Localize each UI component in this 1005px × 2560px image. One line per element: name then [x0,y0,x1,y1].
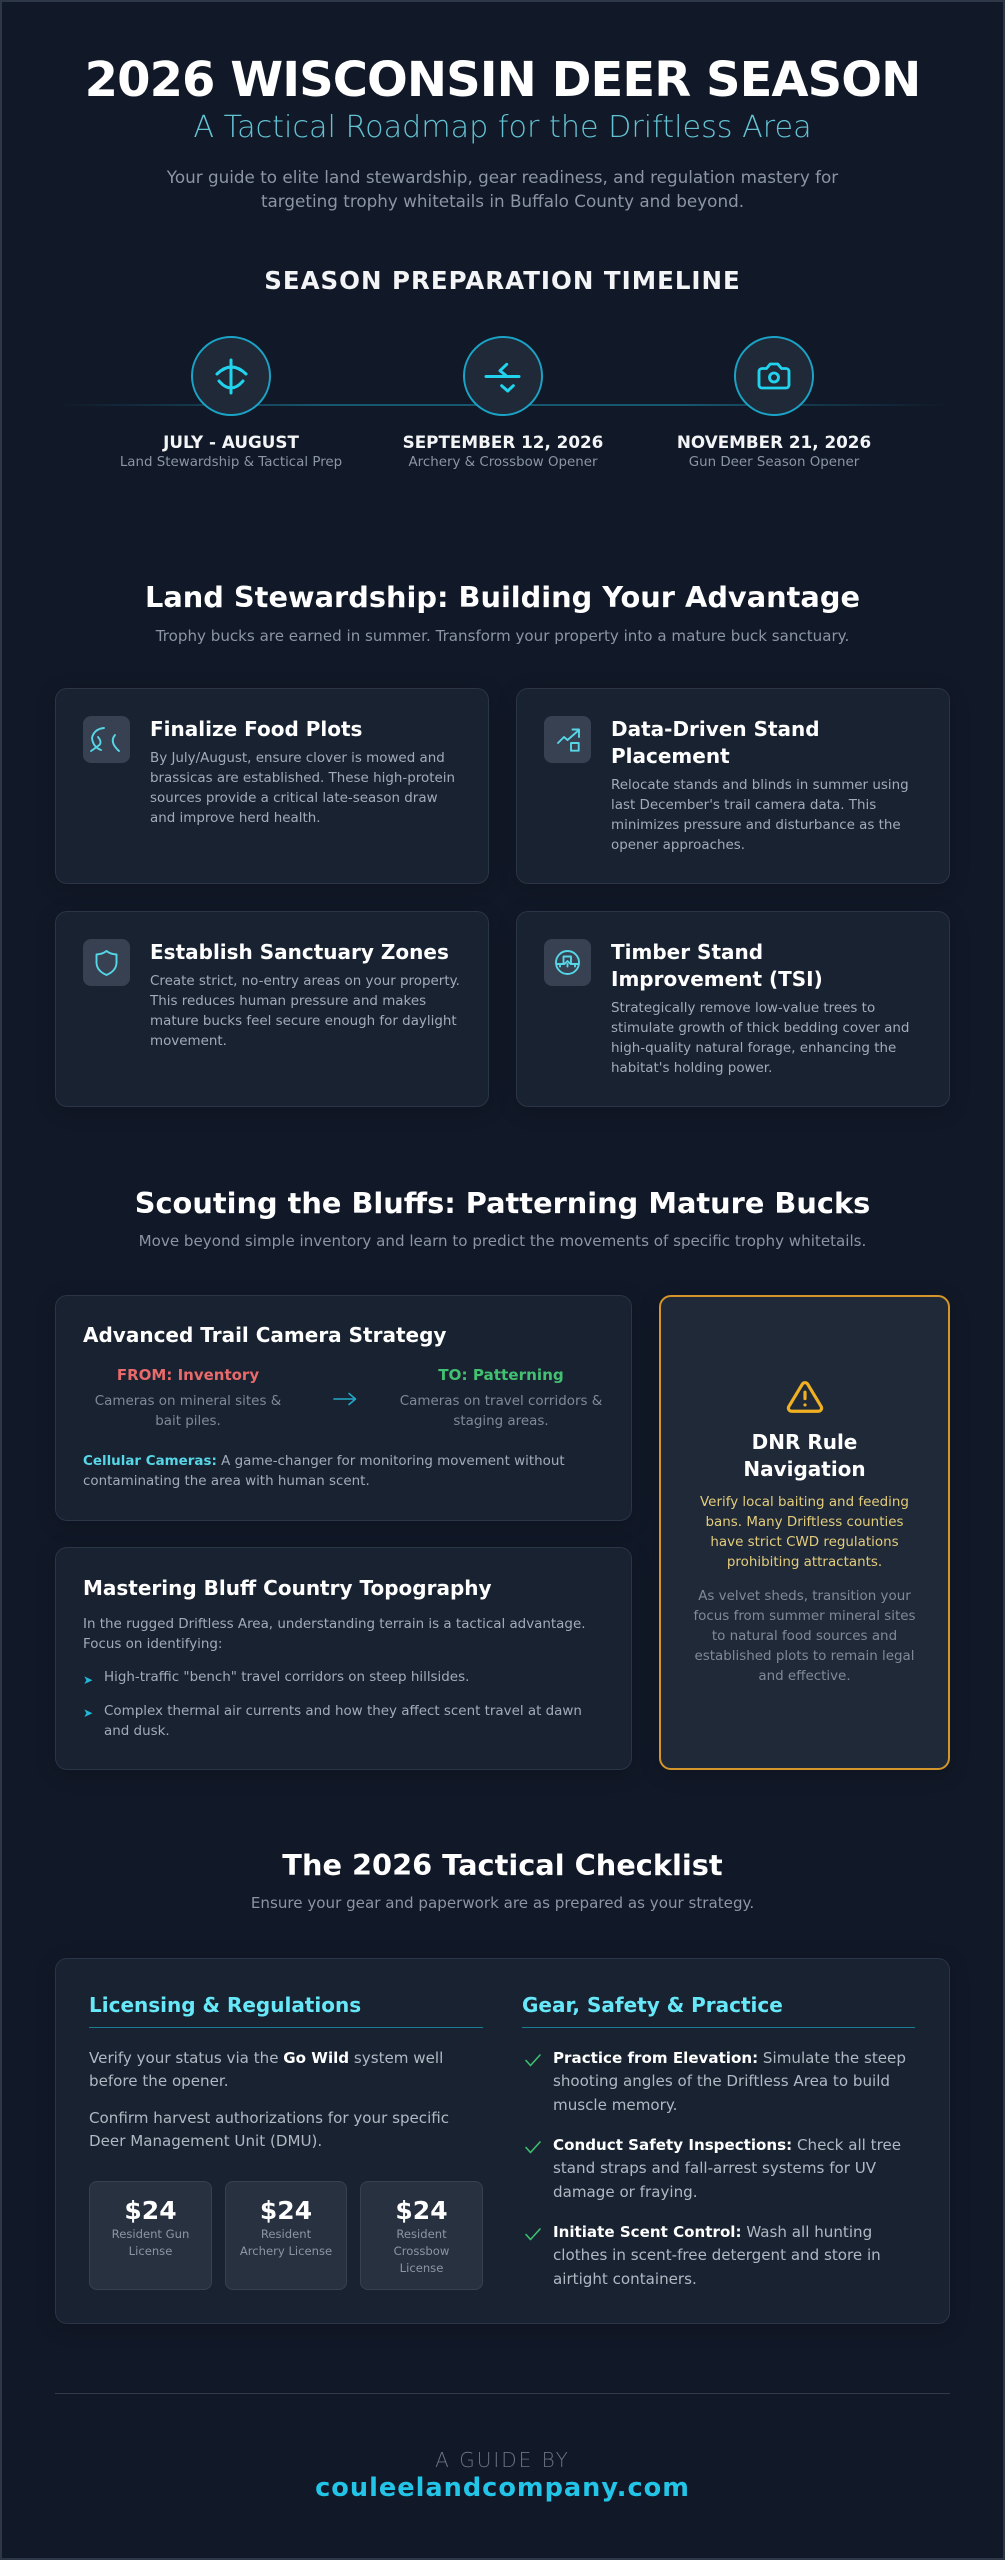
stat: resident archery license: Archery License [240,2244,332,2258]
card title [611,940,823,991]
from column [95,1366,281,1429]
intro text [166,167,838,210]
icon: shield [83,939,130,986]
card title: Establish Sanctuary Zones [150,940,449,964]
bullet text [104,1704,582,1739]
card text: sources provide a critical late-season draw [150,791,438,806]
icon: check [525,2228,541,2240]
card title: Placement [611,744,730,768]
card text: habitat's holding power. [611,1061,772,1076]
subtitle: A Tactical Roadmap for the Driftless Area [193,110,812,145]
section subtitle: Trophy bucks are earned in summer. Transform your property into a mature buck sanctuary. [156,627,849,645]
card text: In the rugged Driftless Area, understanding terrain is a tactical advantage. [83,1617,585,1632]
callout warning text: have strict CWD regulations [710,1535,899,1550]
panel: checklist [55,1958,950,2324]
footer brand: couleelandcompany.com [315,2473,690,2503]
column: licensing and regulations [89,1993,483,2150]
callout title: DNR Rule [752,1430,857,1454]
paragraph: go wild [89,2049,443,2090]
checklist item: elevation [553,2049,906,2114]
stat: resident archery license: Resident [261,2227,311,2241]
column: gear safety and practice [522,1993,915,2288]
checklist item: scent: clothes in scent-free detergent and store in [553,2246,881,2264]
milestone date: JULY - AUGUST [163,432,299,452]
stat: resident archery license [225,2181,347,2290]
checklist item: elevation: muscle memory. [553,2096,677,2114]
card text: Relocate stands and blinds in summer using [611,778,909,793]
cellular cameras note [83,1454,565,1489]
card text [611,1001,909,1076]
panel: trail camera strategy [55,1295,632,1521]
milestone date: SEPTEMBER 12, 2026 [403,432,603,452]
icon: food plot [83,716,130,763]
icon: check [525,2141,541,2154]
callout secondary text: focus from summer mineral sites [693,1609,916,1624]
milestone description: Land Stewardship & Tactical Prep [120,455,342,470]
milestone: November 21 [677,336,871,470]
callout secondary text: and effective. [758,1669,851,1684]
paragraph: go wild: before the opener. [89,2072,229,2090]
paragraph: harvest authorizations [89,2109,449,2150]
icon: trend and square [544,716,591,763]
footer label: A GUIDE BY [435,2448,570,2472]
to text [400,1394,602,1429]
milestone description: Gun Deer Season Opener [689,455,859,470]
bullet text: and dusk. [104,1724,170,1739]
card text [150,751,455,826]
to label: TO: Patterning [438,1366,564,1384]
card title: Timber Stand [611,940,763,964]
card text: Create strict, no-entry areas on your property. [150,974,460,989]
intro text: Your guide to elite land stewardship, gear readiness, and regulation mastery for [167,167,838,187]
paragraph: go wild: Verify your status via the Go Wild system well [89,2049,443,2067]
stat: resident crossbow license: Crossbow [394,2244,449,2258]
bullet marker: ➤ [83,1706,93,1720]
section subtitle: Ensure your gear and paperwork are as prepared as your strategy. [251,1894,754,1912]
checklist item: safety: stand straps and fall-arrest systems for UV [553,2159,876,2177]
checklist item: safety [553,2136,901,2201]
card text: brassicas are established. These high-protein [150,771,455,786]
icon: split arrows [463,336,543,416]
card text: Strategically remove low-value trees to [611,1001,875,1016]
cellular cameras note: contaminating the area with human scent. [83,1474,370,1489]
panel: DNR rule navigation [659,1295,950,1770]
card text: last December's trail camera data. This [611,798,876,813]
to column [400,1366,602,1429]
timeline line [55,404,950,406]
stat: resident archery license: $24 [260,2196,312,2225]
callout secondary text: to natural food sources and [712,1629,897,1644]
callout warning text [700,1495,909,1570]
icon: timber circle [544,939,591,986]
heading: season preparation timeline: SEASON PREPARATION TIMELINE [264,266,741,295]
panel: bluff topography [55,1547,632,1770]
stat: resident crossbow license: License [400,2261,443,2275]
stat: resident crossbow license: Resident [396,2227,447,2241]
checklist item: elevation: shooting angles of the Driftless Area to build [553,2072,890,2090]
from text [95,1394,281,1429]
to text: Cameras on travel corridors & [400,1394,602,1409]
bullet text: High-traffic "bench" travel corridors on steep hillsides. [104,1670,469,1685]
checklist item: safety: Conduct Safety Inspections: Check all tree [553,2136,901,2154]
from text: bait piles. [155,1414,221,1429]
card title [611,717,820,768]
callout title: Navigation [743,1457,866,1481]
card text: Focus on identifying: [83,1637,222,1652]
checklist item: elevation: Practice from Elevation: Simulate the steep [553,2049,906,2067]
icon: check [525,2054,541,2066]
heading: scouting the bluffs: Scouting the Bluffs: Patterning Mature Bucks [135,1186,870,1220]
card title: Mastering Bluff Country Topography [83,1576,492,1600]
checklist item: scent: airtight containers. [553,2270,697,2288]
from text: Cameras on mineral sites & [95,1394,281,1409]
stat: resident gun license [89,2181,212,2290]
milestone date: NOVEMBER 21, 2026 [677,432,871,452]
panel: food plots [55,688,489,884]
bullet text: Complex thermal air currents and how they affect scent travel at dawn [104,1704,582,1719]
timeline [86,336,919,470]
card text: opener approaches. [611,838,745,853]
callout title [743,1430,866,1481]
card text: minimizes pressure and disturbance as the [611,818,901,833]
stat: resident gun license: License [129,2244,172,2258]
panel: stand placement [516,688,950,884]
to text: staging areas. [453,1414,549,1429]
panel: sanctuary zones [55,911,489,1107]
paragraph: harvest authorizations: Confirm harvest authorizations for your specific [89,2109,449,2127]
column heading: Licensing & Regulations [89,1993,361,2017]
callout warning text: bans. Many Driftless counties [706,1515,903,1530]
intro text: targeting trophy whitetails in Buffalo County and beyond. [261,190,744,210]
column heading: Gear, Safety & Practice [522,1993,783,2017]
checklist item: scent [553,2223,881,2288]
card title: Finalize Food Plots [150,717,362,741]
card text: This reduces human pressure and makes [150,994,426,1009]
bullet marker: ➤ [83,1673,93,1687]
card text: movement. [150,1034,227,1049]
card text [150,974,460,1049]
icon: anchor marker [191,336,271,416]
card title: Improvement (TSI) [611,967,823,991]
callout secondary text [693,1589,916,1684]
card title: Data-Driven Stand [611,717,820,741]
card title: Advanced Trail Camera Strategy [83,1323,446,1347]
card text: By July/August, ensure clover is mowed and [150,751,445,766]
callout secondary text: established plots to remain legal [694,1649,914,1664]
milestone description: Archery & Crossbow Opener [409,455,597,470]
heading: land stewardship: Land Stewardship: Building Your Advantage [145,580,860,614]
milestone: July - August [120,336,342,470]
stat: resident crossbow license [360,2181,483,2290]
callout warning text: prohibiting attractants. [727,1555,882,1570]
arrow: from to [333,1392,356,1406]
callout secondary text: As velvet sheds, transition your [698,1589,911,1604]
panel: timber stand improvement [516,911,950,1107]
stat: resident gun license: $24 [124,2196,177,2225]
from label: FROM: Inventory [117,1366,259,1384]
card text: stimulate growth of thick bedding cover and [611,1021,909,1036]
milestone: September 12 [403,336,603,470]
callout warning text: Verify local baiting and feeding [700,1495,909,1510]
section subtitle: Move beyond simple inventory and learn to predict the movements of specific trophy whitetails. [139,1232,866,1250]
stat: resident gun license: Resident Gun [112,2227,189,2241]
stat: resident crossbow license: $24 [395,2196,448,2225]
checklist item: scent: Initiate Scent Control: Wash all hunting [553,2223,872,2241]
card text: mature bucks feel secure enough for daylight [150,1014,457,1029]
card text: and improve herd health. [150,811,321,826]
card text [611,778,909,853]
heading: tactical checklist: The 2026 Tactical Checklist [282,1848,723,1882]
paragraph: harvest authorizations: Deer Management Unit (DMU). [89,2132,322,2150]
checklist item: safety: damage or fraying. [553,2183,698,2201]
footer [315,2448,690,2503]
title: 2026 WISCONSIN DEER SEASON [85,52,920,108]
icon: camera [734,336,814,416]
icon: warning triangle [786,1381,824,1413]
card text [83,1617,585,1652]
cellular cameras note: Cellular Cameras: A game-changer for monitoring movement without [83,1454,565,1469]
card text: high-quality natural forage, enhancing the [611,1041,896,1056]
